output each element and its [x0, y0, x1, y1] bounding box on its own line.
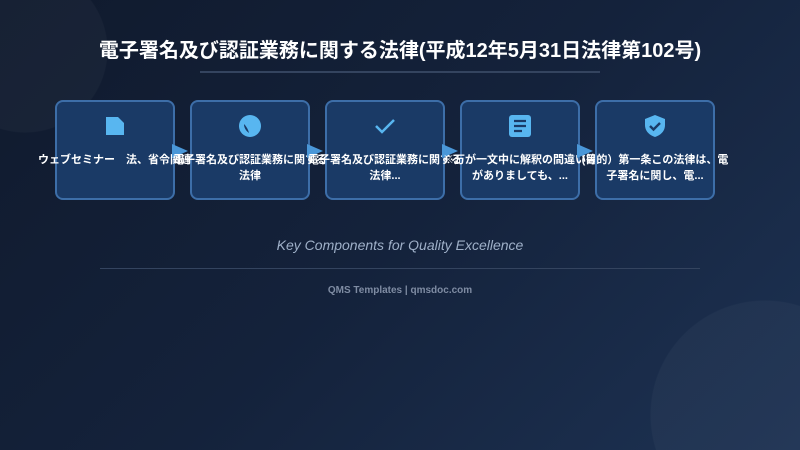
- card 3: [325, 100, 445, 200]
- text 1: ウェブセミナー 法、省令関連: [38, 154, 192, 166]
- subtitle: Key Components for Quality Excellence: [277, 237, 523, 253]
- footer: QMS Templates | qmsdoc.com: [328, 285, 472, 296]
- icon: globe: [239, 115, 261, 137]
- text 5: (目的）第一条この法律は、電子署名に関し、電...: [582, 154, 728, 182]
- card 5: [595, 100, 715, 200]
- text 3: 電子署名及び認証業務に関する法律...: [308, 154, 462, 182]
- arrow 4: [577, 144, 593, 158]
- card 2: [190, 100, 310, 200]
- arrow 1: [172, 144, 188, 158]
- icon: shield: [645, 115, 665, 137]
- text 2: 電子署名及び認証業務に関する法律: [173, 154, 327, 182]
- icon: file: [106, 117, 124, 135]
- title: 電子署名及び認証業務に関する法律(平成12年5月31日法律第102号): [99, 40, 701, 62]
- arrow 2: [307, 144, 323, 158]
- card 1: [55, 100, 175, 200]
- icon: check: [375, 119, 395, 134]
- arrow 3: [442, 144, 458, 158]
- card 4: [460, 100, 580, 200]
- text 4: ※万が一文中に解釈の間違い等がありましても、...: [443, 154, 597, 182]
- icon: document: [509, 115, 531, 137]
